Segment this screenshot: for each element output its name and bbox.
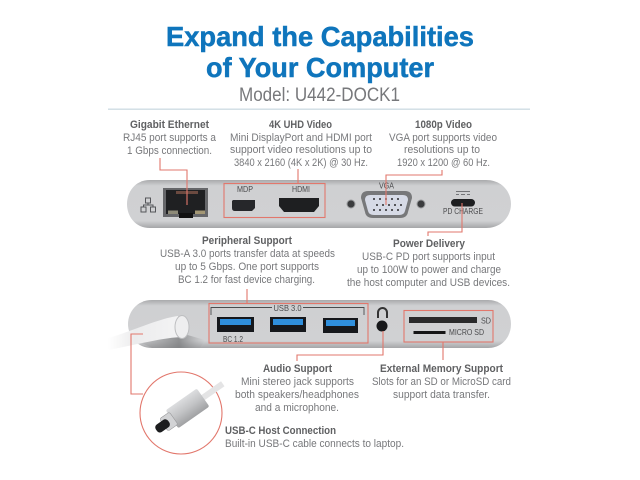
- text: Peripheral Support: [160, 235, 335, 286]
- text: External Memory Support: support data transfer.: [393, 389, 490, 401]
- text: Power Delivery: Power Delivery: [393, 238, 466, 250]
- VGA port: [361, 191, 412, 218]
- label SD: SD: [481, 316, 491, 326]
- text: Peripheral Support: USB-A 3.0 ports transfer data at speeds: [160, 248, 335, 260]
- callout circle: [140, 372, 222, 454]
- label MDP: MDP: [237, 184, 253, 194]
- top dock panel: [127, 180, 511, 228]
- symbol: DC: [456, 192, 470, 194]
- cable shadow: [140, 334, 205, 348]
- SD slot: [409, 317, 477, 323]
- leader line VGA: [386, 170, 442, 205]
- dock body: [127, 180, 511, 228]
- screw left: [347, 200, 355, 208]
- leader line ethernet: [160, 158, 187, 205]
- icon: network: [141, 198, 156, 212]
- text: Power Delivery: up to 100W to power and charge: [357, 264, 501, 276]
- leader line audio: [297, 331, 383, 361]
- icon: headphones: [378, 308, 387, 318]
- label BC 1.2: BC 1.2: [223, 334, 243, 344]
- text: Power Delivery: [347, 238, 510, 289]
- USB port 3: [323, 318, 358, 333]
- text: Peripheral Support: up to 5 Gbps. One port supports: [175, 261, 319, 273]
- text: 1080p Video: 1920 x 1200 @ 60 Hz.: [397, 157, 490, 169]
- leader line power: [428, 203, 462, 236]
- text: 4K UHD Video: support video resolutions up to: [230, 144, 372, 156]
- USB port 2: [270, 317, 306, 332]
- text: 1080p Video: resolutions up to: [404, 144, 480, 156]
- text: 4K UHD Video: 3840 x 2160 (4K x 2K) @ 30 Hz.: [234, 157, 368, 169]
- text: External Memory Support: Slots for an SD or MicroSD card: [372, 376, 511, 388]
- leader line peripheral: [246, 289, 248, 303]
- USB box: [209, 304, 368, 343]
- label HDMI: HDMI: [292, 184, 310, 194]
- text: Gigabit Ethernet: 1 Gbps connection.: [127, 145, 212, 157]
- label PD CHARGE: PD CHARGE: [443, 206, 483, 216]
- text: USB-C Host Connection: [225, 425, 404, 450]
- label USB 3.0: USB 3.0: [274, 303, 302, 313]
- leader line host: [131, 334, 143, 394]
- USB-C port: [451, 199, 475, 206]
- bottom dock panel: [108, 300, 511, 350]
- dock body: [128, 300, 511, 348]
- title: Expand the Capabilities: [166, 21, 474, 52]
- text: 4K UHD Video: 4K UHD Video: [269, 119, 332, 131]
- text: Gigabit Ethernet: Gigabit Ethernet: [130, 119, 209, 131]
- text: 1080p Video: 1080p Video: [415, 119, 472, 131]
- screw right: [417, 200, 425, 208]
- text: External Memory Support: External Memory Support: [380, 363, 503, 375]
- leader line memory: [442, 342, 444, 360]
- cable: [108, 316, 184, 350]
- text: Gigabit Ethernet: RJ45 port supports a: [123, 132, 217, 144]
- USB-C connector callout: [140, 372, 229, 454]
- text: 4K UHD Video: [230, 119, 372, 169]
- title: of Your Computer: [206, 52, 434, 83]
- MDP and HDMI box: [224, 184, 325, 218]
- header rule: [108, 108, 530, 110]
- text: Audio Support: and a microphone.: [255, 402, 339, 414]
- label MICRO SD: MICRO SD: [449, 327, 484, 337]
- model subtitle: Model: U442-DOCK1: [239, 85, 400, 106]
- connector: [150, 375, 229, 439]
- cable collar: [175, 316, 189, 338]
- RJ45 port: [163, 188, 208, 218]
- text: Audio Support: Audio Support: [263, 363, 332, 375]
- text: 1080p Video: VGA port supports video: [389, 132, 497, 144]
- USB 3.0 bracket: [211, 308, 364, 315]
- text: Audio Support: both speakers/headphones: [235, 389, 359, 401]
- USB port 1: [217, 317, 254, 332]
- text: 1080p Video: [389, 119, 497, 169]
- text: USB-C Host Connection: Built-in USB-C cable connects to laptop.: [225, 438, 404, 450]
- text: Power Delivery: the host computer and USB devices.: [347, 277, 510, 289]
- leader line HDMI: [297, 169, 299, 183]
- micro SD slot: [414, 331, 446, 334]
- text: Gigabit Ethernet: [123, 119, 217, 157]
- text: Peripheral Support: Peripheral Support: [202, 235, 292, 247]
- label VGA: VGA: [379, 180, 394, 190]
- text: USB-C Host Connection: USB-C Host Connection: [225, 425, 336, 437]
- text: Power Delivery: USB-C PD port supports input: [362, 251, 495, 263]
- text: Peripheral Support: BC 1.2 for fast device charging.: [178, 274, 315, 286]
- text: 4K UHD Video: Mini DisplayPort and HDMI port: [230, 132, 372, 144]
- text: External Memory Support: [372, 363, 511, 401]
- title: [166, 21, 474, 83]
- memory box: [404, 310, 493, 342]
- audio jack: [376, 320, 388, 332]
- text: Audio Support: Mini stereo jack supports: [241, 376, 354, 388]
- MDP port: [232, 200, 255, 211]
- HDMI port: [279, 198, 319, 212]
- text: Audio Support: [235, 363, 359, 414]
